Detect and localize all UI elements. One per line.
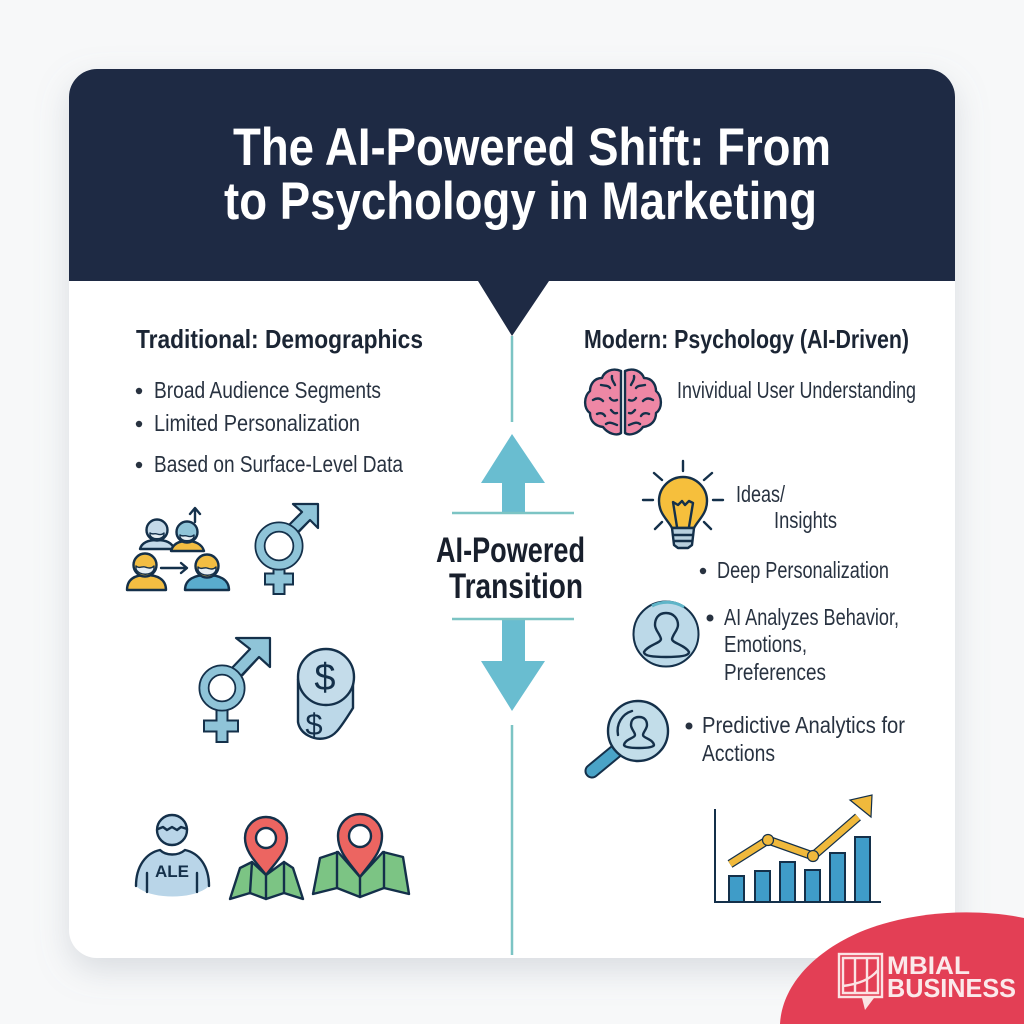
bullet: Predictive Analytics: Acctions <box>702 740 775 766</box>
text: Ideas / Insights: Ideas/ <box>736 481 785 507</box>
text: Individual User Understanding: Invividual User Understanding <box>677 377 916 403</box>
title: The AI-Powered Shift: From <box>233 118 831 177</box>
bullet: AI Analyzes Behavior: AI Analyzes Behavior, <box>724 604 899 630</box>
left bullet list: Based on Surface-Level Data <box>154 451 403 477</box>
panel: main card <box>69 69 955 958</box>
icon: gender symbol 2 <box>203 638 270 743</box>
logo: Mbial Business badge <box>780 912 1024 1024</box>
logo: Mbial Business badge: BUSINESS <box>887 973 1016 1003</box>
icon: audience group <box>127 508 229 590</box>
center divider: top line <box>511 336 513 422</box>
icon: dollar coins <box>298 649 354 742</box>
arrow: up <box>481 434 545 513</box>
heading: Modern Psychology: Modern: Psychology (AI-Driven) <box>584 324 909 354</box>
left bullet list: Limited Personalization <box>154 410 360 436</box>
bullet: AI Analyzes Behavior: Emotions, <box>724 631 807 657</box>
header banner with notch <box>69 69 955 336</box>
title: to Psychology in Marketing <box>224 172 817 231</box>
center label: AI-Powered Transition: Transition <box>449 567 583 606</box>
center divider: bottom line <box>511 725 513 955</box>
icon: user profile circle <box>634 602 698 666</box>
left bullet list <box>136 377 403 477</box>
text: Ideas / Insights: Insights <box>774 507 837 533</box>
heading: Traditional Demographics: Traditional: Demographics <box>136 324 423 354</box>
bullet: Predictive Analytics: Predictive Analytics for <box>702 712 905 738</box>
center label: AI-Powered Transition <box>436 531 585 606</box>
icon: person with ALE shirt: ALE <box>155 862 189 881</box>
bullet: Predictive Analytics <box>686 712 905 766</box>
chart: growth bars with trend arrow <box>715 795 881 902</box>
icon: brain <box>585 370 661 434</box>
icon: map pin 1 <box>230 817 303 899</box>
logo: Mbial Business badge: MBIAL <box>887 952 970 980</box>
text: Ideas / Insights <box>736 481 837 533</box>
title <box>224 118 831 231</box>
left bullet list: Broad Audience Segments <box>154 377 381 403</box>
bullet: AI Analyzes Behavior <box>706 604 899 685</box>
arrow: down <box>481 619 545 711</box>
icon: map pin 2 <box>313 814 409 897</box>
bullet: Deep Personalization: Deep Personalization <box>717 557 889 583</box>
icon: lightbulb <box>643 461 723 548</box>
icon: dollar coins: $ <box>305 707 323 742</box>
icon: gender symbol 1 <box>260 504 318 595</box>
icon: person with ALE shirt <box>136 815 209 896</box>
center label: AI-Powered Transition: AI-Powered <box>436 531 585 570</box>
icon: magnifier with user <box>592 701 668 771</box>
bullet: AI Analyzes Behavior: Preferences <box>724 659 826 685</box>
icon: dollar coins: $ <box>314 657 336 699</box>
